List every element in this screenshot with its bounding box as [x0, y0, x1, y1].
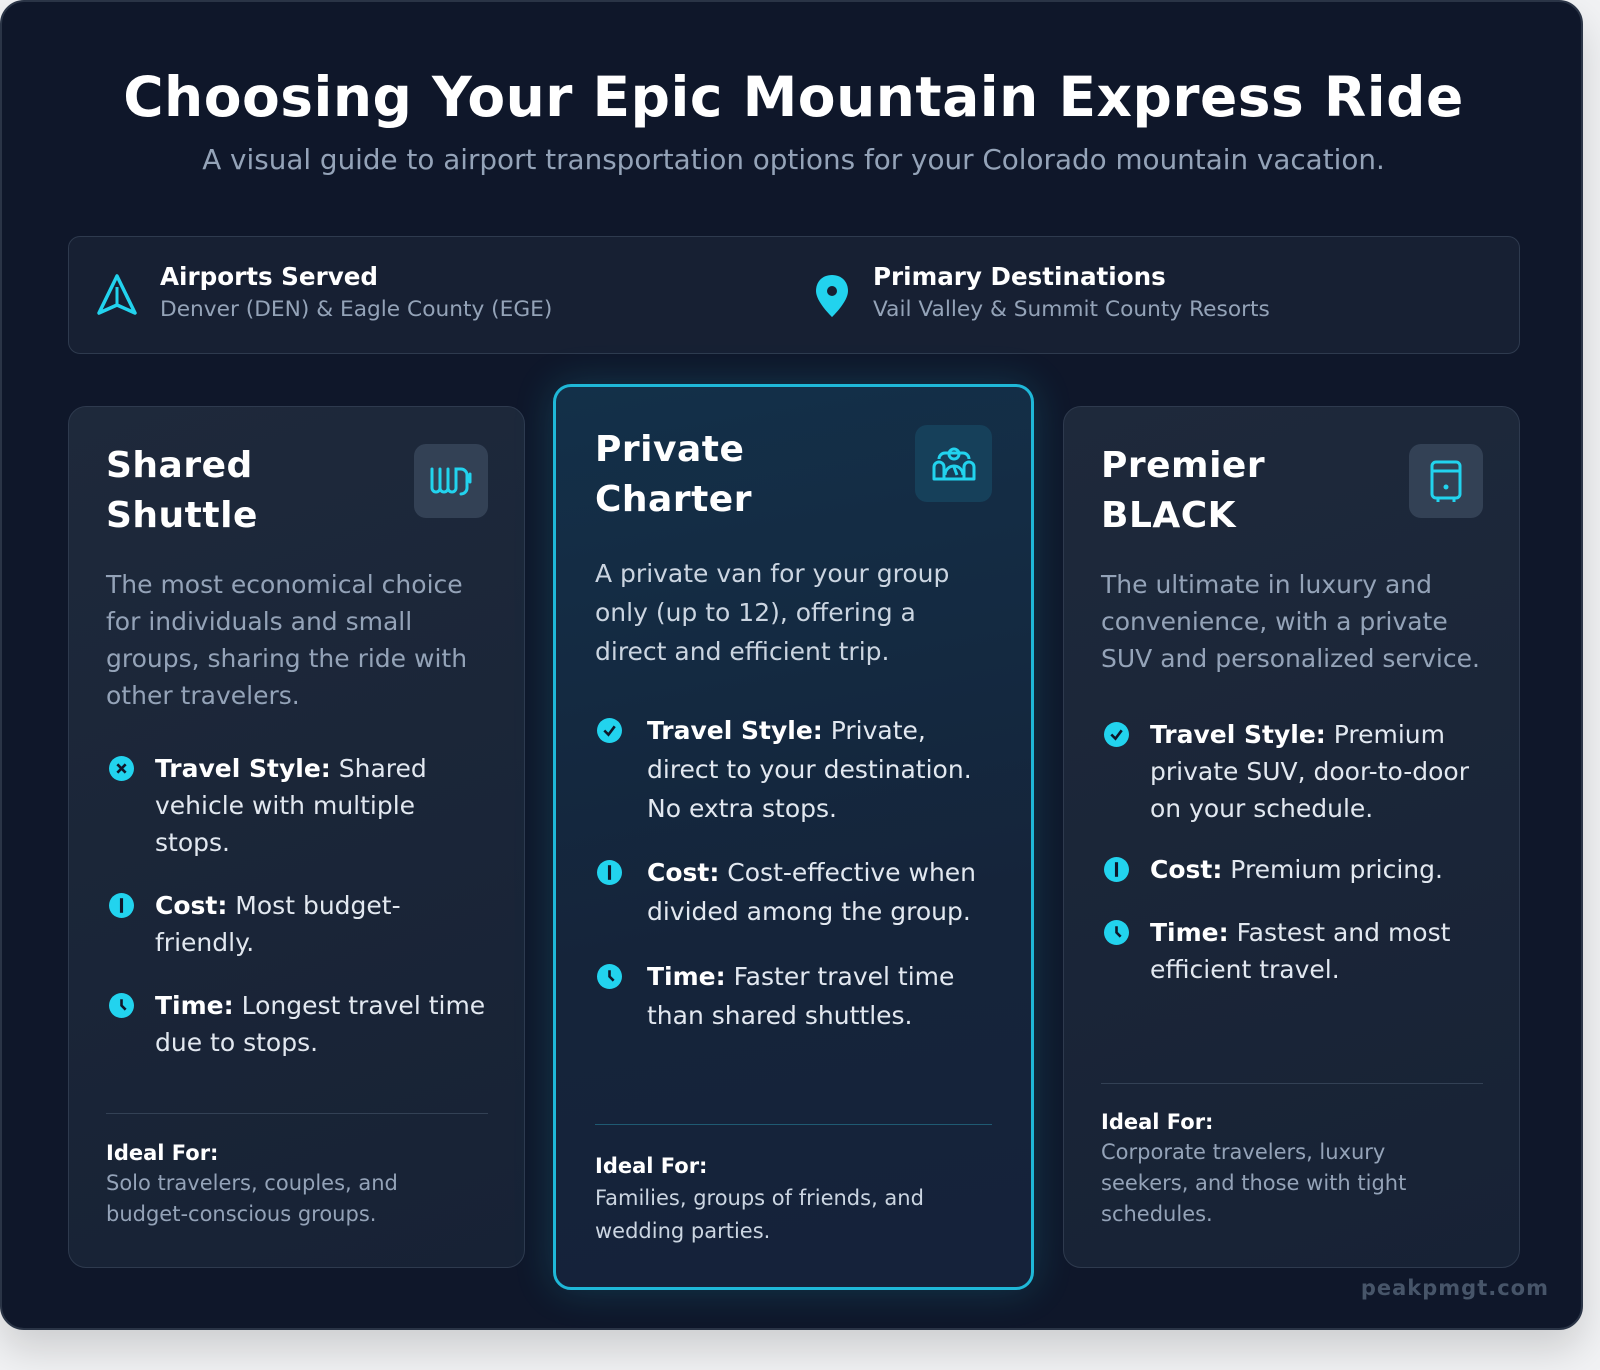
heading [1101, 445, 1265, 536]
bullet: travel style [597, 716, 972, 823]
icon: van group [915, 425, 992, 502]
icon: airplane triangle [97, 274, 137, 315]
panel: private charter: Travel Style: Private, direct to your destination. No extra stops. [647, 716, 972, 823]
bullet: cost [109, 891, 401, 957]
panel: shared shuttle: Cost: Most budget-friendly. [155, 891, 401, 957]
heading [595, 429, 752, 520]
destinations text: Primary Destinations [873, 262, 1166, 291]
panel: premier black [1063, 406, 1520, 1268]
panel: shared shuttle: Time: Longest travel time due to stops. [155, 991, 485, 1057]
icon: map pin [816, 275, 848, 317]
bullet: travel style [109, 754, 427, 857]
watermark: peakpmgt.com [1361, 1276, 1549, 1300]
destinations text: Vail Valley & Summit County Resorts [873, 297, 1270, 322]
bullet: time [597, 962, 954, 1030]
panel: private charter [553, 384, 1034, 1290]
info bar [68, 236, 1520, 354]
panel: premier black: Travel Style: Premium private SUV, door-to-door on your schedule. [1150, 720, 1469, 823]
heading: BLACK [1101, 495, 1236, 536]
bullet: time [1104, 918, 1450, 984]
description: The most economical choice for individuals and small groups, sharing the ride with other travelers. [106, 570, 467, 710]
ideal for [106, 1141, 398, 1226]
bullet: travel style [1104, 720, 1470, 823]
panel: shared shuttle: Travel Style: Shared vehicle with multiple stops. [155, 754, 427, 857]
airports text [160, 262, 552, 322]
panel: shared shuttle [68, 406, 525, 1268]
ideal for [595, 1154, 924, 1243]
airports text: Airports Served [160, 262, 378, 291]
bullet: cost [597, 858, 976, 926]
heading: Shuttle [106, 495, 258, 536]
bullet: cost [1104, 855, 1443, 884]
ideal for: Corporate travelers, luxury seekers, and those with tight schedules. [1101, 1140, 1406, 1226]
heading [106, 445, 258, 536]
panel: private charter: Cost: Cost-effective when divided among the group. [647, 858, 976, 926]
panel: private charter: Time: Faster travel time than shared shuttles. [647, 962, 954, 1030]
title: Choosing Your Epic Mountain Express Ride [123, 65, 1464, 129]
heading: Charter [595, 479, 752, 520]
destinations text [873, 262, 1270, 322]
description: The ultimate in luxury and convenience, with a private SUV and personalized service. [1101, 570, 1480, 673]
panel: premier black: Cost: Premium pricing. [1150, 855, 1443, 884]
subtitle: A visual guide to airport transportation options for your Colorado mountain vacation. [202, 143, 1385, 176]
icon: suv [1409, 444, 1483, 518]
description: A private van for your group only (up to 12), offering a direct and efficient trip. [595, 559, 949, 666]
ideal for: Ideal For: [1101, 1110, 1213, 1134]
ideal for: Solo travelers, couples, and budget-conscious groups. [106, 1171, 398, 1226]
heading: Private [595, 429, 744, 470]
ideal for: Families, groups of friends, and wedding parties. [595, 1186, 924, 1243]
ideal for: Ideal For: [595, 1154, 707, 1178]
heading: Shared [106, 445, 253, 486]
ideal for: Ideal For: [106, 1141, 218, 1165]
heading: Premier [1101, 445, 1265, 486]
icon: bus [414, 444, 488, 518]
panel: premier black: Time: Fastest and most efficient travel. [1150, 918, 1450, 984]
bullet: time [109, 991, 485, 1057]
airports text: Denver (DEN) & Eagle County (EGE) [160, 297, 552, 322]
